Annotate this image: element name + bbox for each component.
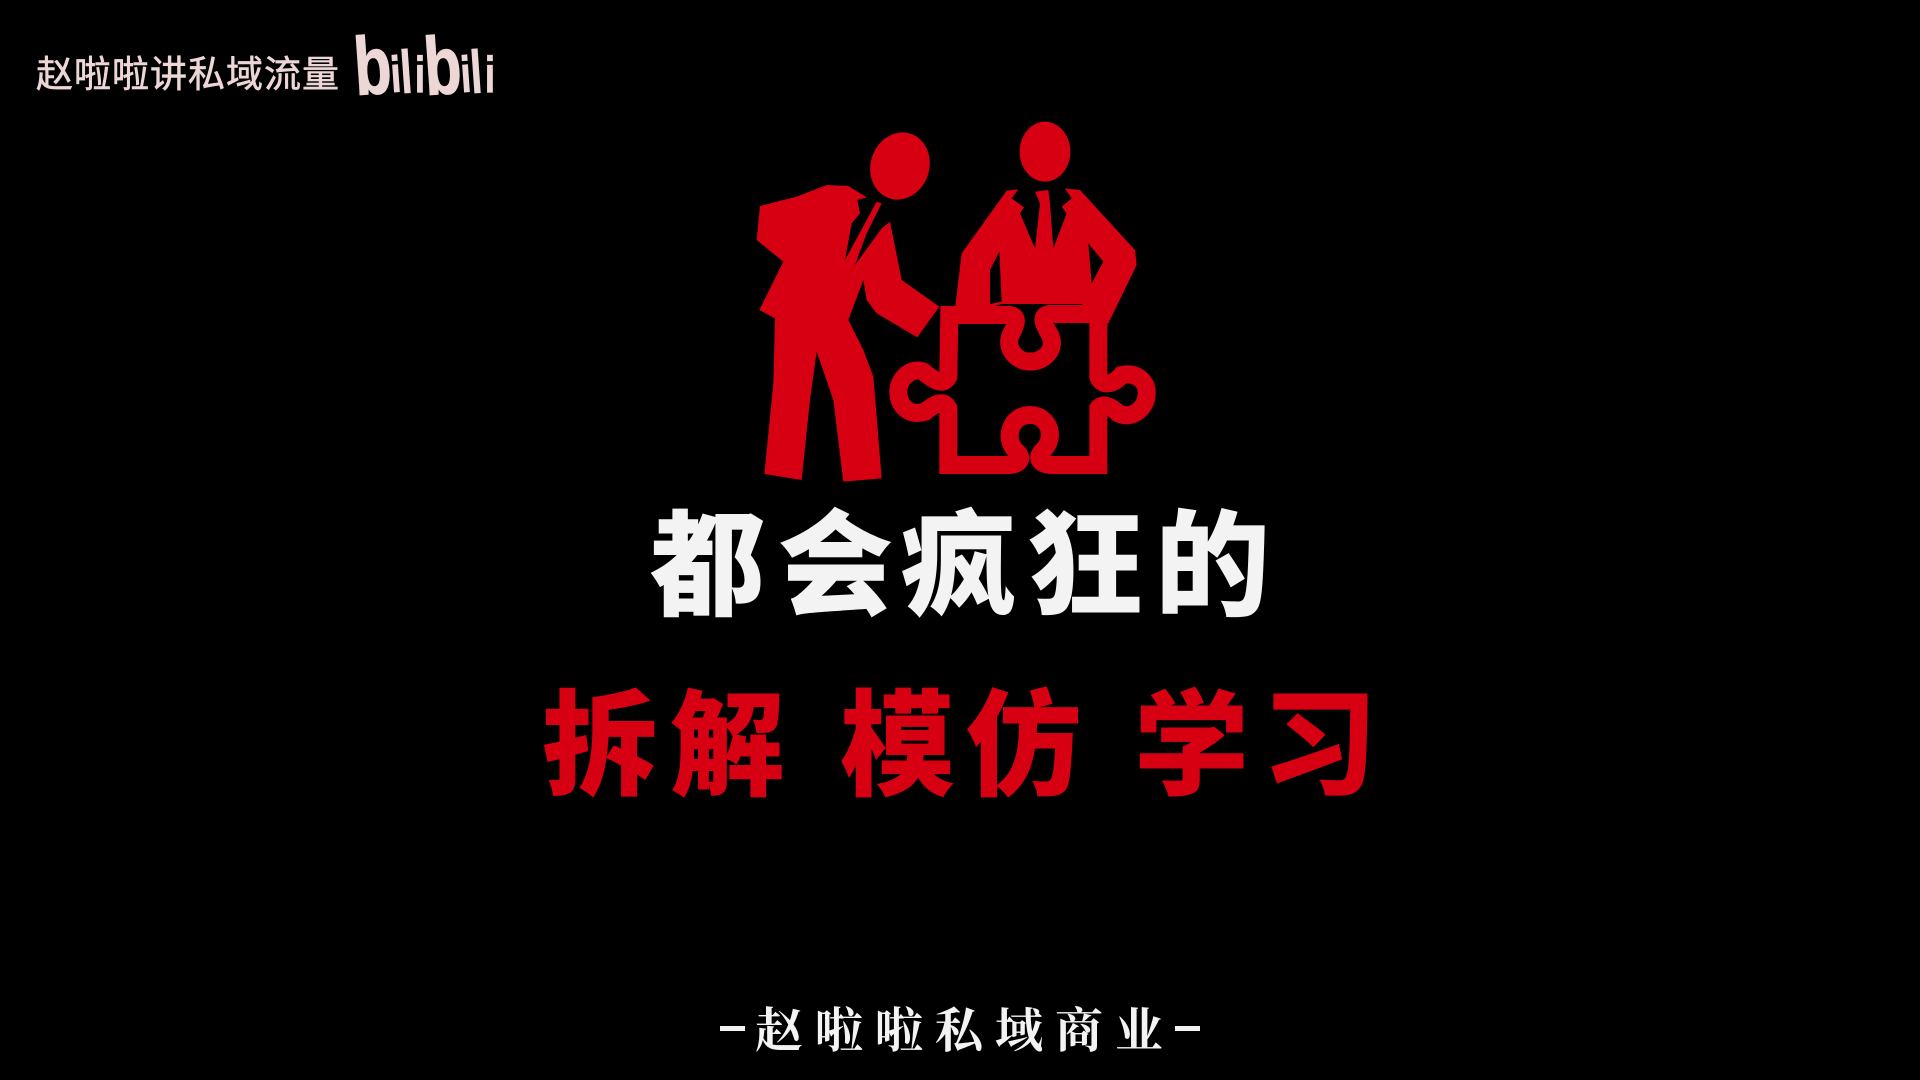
bilibili logo xyxy=(351,20,495,113)
icon: two businessmen assembling a puzzle piece xyxy=(757,122,1147,482)
heading: red keywords: 仿 xyxy=(966,683,1081,811)
channel name: 赵啦啦讲私域流量 xyxy=(36,54,340,95)
right businessman xyxy=(955,122,1137,323)
left businessman xyxy=(757,125,939,482)
heading: red keywords: 拆 xyxy=(542,683,657,811)
heading: white line xyxy=(650,503,1270,631)
heading: red keywords: 习 xyxy=(1262,683,1377,811)
heading: white line: 狂 xyxy=(1028,503,1143,631)
heading: red keywords: 学 xyxy=(1134,683,1249,811)
heading: white line: 的 xyxy=(1155,503,1270,631)
bilibili logo: i xyxy=(459,46,473,104)
bilibili logo: l xyxy=(398,38,414,106)
bilibili logo: i xyxy=(415,47,425,104)
bilibili logo: b xyxy=(351,20,394,113)
heading: white line: 会 xyxy=(778,503,893,631)
footer signature: 赵啦啦私域商业 xyxy=(755,1005,1175,1058)
heading: red keywords: 模 xyxy=(840,683,955,811)
bilibili logo: i xyxy=(389,46,403,104)
bilibili logo: l xyxy=(468,38,484,106)
heading: red keywords: 解 xyxy=(670,683,785,811)
puzzle piece xyxy=(898,314,1147,465)
heading: white line: 都 xyxy=(650,503,765,631)
heading: red keywords xyxy=(542,683,1377,811)
bilibili logo: b xyxy=(421,20,464,113)
heading: white line: 疯 xyxy=(901,503,1016,631)
bilibili logo: i xyxy=(485,47,495,104)
